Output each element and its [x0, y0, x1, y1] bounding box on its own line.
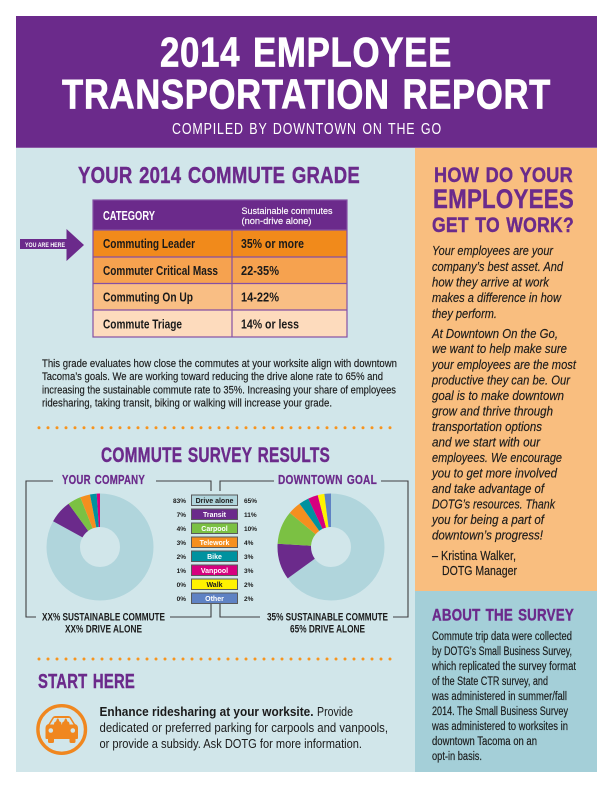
text block: survey description: of the State CTR survey, and	[432, 676, 548, 688]
text block: employees message: goal is to make downtown	[432, 389, 564, 403]
text block: survey description: 2014. The Small Business Survey	[432, 706, 568, 718]
subtitle: COMPILED BY DOWNTOWN ON THE GO	[172, 121, 442, 138]
text block: employees message: and take advantage of	[432, 482, 545, 496]
legend: commute modes with percentages: 65%	[244, 498, 257, 505]
table: commute grade categories: Sustainable commutes	[242, 206, 333, 217]
legend: commute modes with percentages: 2%	[177, 554, 186, 561]
legend: commute modes with percentages: 83%	[173, 498, 186, 505]
text block: employees message: DOTG’s resources. Thank	[432, 498, 556, 512]
legend: commute modes with percentages: Other	[205, 596, 224, 603]
table: commute grade categories	[93, 200, 347, 337]
caption: downtown goal: 35% SUSTAINABLE COMMUTE	[267, 612, 388, 624]
legend: commute modes with percentages: Telework	[200, 540, 230, 547]
text block: employees message: your employees are the most	[431, 358, 576, 372]
text block: survey description: was administered in summer/fall	[431, 691, 567, 703]
text block: survey description: Commute trip data were collected	[432, 631, 572, 643]
heading: start here: START HERE	[38, 671, 135, 693]
text block: employees message: you for being a part of	[431, 513, 545, 527]
table: commute grade categories: Commuter Critical Mass	[103, 264, 218, 278]
text block: employees message: they perform.	[432, 307, 497, 321]
legend: commute modes with percentages: 2%	[244, 596, 254, 603]
legend: commute modes with percentages: Drive alone	[196, 498, 233, 505]
text block: employees message: company’s best asset. And	[432, 260, 564, 274]
text block: employees message: and we start with our	[432, 436, 541, 450]
text block: employees message: you to get more involved	[431, 466, 558, 480]
text block: enhance ridesharing	[100, 705, 388, 751]
caption: your company: XX% DRIVE ALONE	[65, 624, 142, 636]
text block: employees message	[431, 244, 576, 542]
text block: survey description: opt-in basis.	[432, 751, 482, 763]
text block: enhance ridesharing: Enhance ridesharing at your worksite.	[100, 705, 314, 719]
table: commute grade categories: Commuting Leader	[103, 237, 195, 251]
legend: commute modes with percentages: 3%	[177, 540, 186, 547]
text block: survey description: downtown Tacoma on an	[432, 736, 537, 748]
text block: survey description: was administered to worksites in	[431, 721, 568, 733]
donut chart: downtown goal	[294, 510, 368, 584]
legend: commute modes with percentages: 0%	[177, 582, 186, 589]
legend: commute modes with percentages: 2%	[244, 582, 254, 589]
text block: grade explanation: increasing the sustainable commute rate to 35%. Increasing your share of employees	[42, 384, 396, 396]
legend: commute modes with percentages: 3%	[244, 568, 254, 575]
legend: commute modes with percentages: 0%	[177, 596, 186, 603]
text block: signature: – Kristina Walker,	[432, 549, 516, 563]
text block: enhance ridesharing: or provide a subsidy. Ask DOTG for more information.	[100, 737, 362, 751]
text block: signature: DOTG Manager	[442, 564, 517, 578]
text block: employees message: grow and thrive through	[432, 404, 553, 418]
panel: how do your employees get to work	[415, 148, 597, 591]
table: commute grade categories: (non-drive alone)	[242, 216, 312, 227]
text block: signature	[432, 549, 517, 578]
table: commute grade categories: 14-22%	[241, 290, 279, 304]
text block: employees message: transportation options	[432, 420, 542, 434]
text block: grade explanation: ridesharing, taking transit, biking or walking will increase your grade.	[42, 398, 332, 410]
text block: employees message: we want to help make sure	[432, 342, 567, 356]
legend: commute modes with percentages: Bike	[207, 554, 222, 561]
text block: employees message: At Downtown On the Go,	[431, 327, 558, 341]
table: commute grade categories: Commute Triage	[103, 318, 182, 332]
caption: downtown goal	[267, 612, 388, 636]
title: 2014 EMPLOYEE	[160, 28, 452, 76]
text block: employees message: Your employees are your	[432, 244, 554, 258]
table: commute grade categories: 14% or less	[241, 318, 299, 332]
arrow: you are here	[20, 229, 84, 261]
legend: commute modes with percentages: Carpool	[201, 526, 228, 533]
text block: survey description: by DOTG’s Small Business Survey,	[432, 646, 572, 658]
panel: commute grade and survey results	[16, 147, 597, 772]
legend: commute modes with percentages: 3%	[244, 554, 254, 561]
icon: car	[38, 706, 86, 753]
heading: about the survey: ABOUT THE SURVEY	[432, 606, 574, 624]
legend: commute modes with percentages: 1%	[177, 568, 186, 575]
legend: commute modes with percentages: Transit	[203, 512, 227, 519]
heading: commute survey results: COMMUTE SURVEY RESULTS	[101, 444, 330, 467]
bracket: downtown goal	[220, 481, 408, 617]
table: commute grade categories: CATEGORY	[103, 209, 155, 223]
legend: commute modes with percentages: 4%	[244, 540, 254, 547]
text block: employees message: employees. We encourage	[432, 451, 562, 465]
caption: downtown goal: 65% DRIVE ALONE	[290, 624, 365, 636]
caption: your company	[42, 612, 165, 636]
table: commute grade categories: Commuting On Up	[103, 290, 193, 304]
heading: downtown goal: DOWNTOWN GOAL	[278, 472, 377, 487]
text block: survey description	[431, 631, 577, 763]
heading: how do your employees get to work: EMPLOYEES	[433, 184, 574, 214]
panel: about the survey	[415, 591, 597, 772]
heading: how do your employees get to work: HOW DO YOUR	[434, 163, 573, 187]
heading: how do your employees get to work: GET TO WORK?	[432, 214, 574, 237]
title	[62, 28, 551, 118]
caption: your company: XX% SUSTAINABLE COMMUTE	[42, 612, 165, 624]
legend: commute modes with percentages: 7%	[177, 512, 186, 519]
legend: commute modes with percentages	[173, 495, 257, 604]
text block: enhance ridesharing: dedicated or preferred parking for carpools and vanpools,	[100, 721, 388, 735]
text block: enhance ridesharing: Provide	[317, 705, 353, 719]
legend: commute modes with percentages: 4%	[177, 526, 186, 533]
donut chart: your company	[63, 510, 137, 584]
text block: grade explanation: This grade evaluates how close the commutes at your worksite align with downtown	[42, 358, 397, 370]
text block: survey description: which replicated the survey format	[431, 661, 577, 673]
bracket: your company	[26, 481, 211, 617]
text block: grade explanation: Tacoma’s goals. We are working toward reducing the drive alone rate to 65% and	[42, 371, 383, 383]
text block: employees message: productive they can be. Our	[431, 374, 571, 388]
heading: your 2014 commute grade: YOUR 2014 COMMUTE GRADE	[78, 162, 360, 188]
heading: your company: YOUR COMPANY	[62, 472, 145, 487]
text block: employees message: downtown’s progress!	[432, 528, 543, 542]
legend: commute modes with percentages: 10%	[244, 526, 257, 533]
text block: employees message: how they arrive at work	[432, 276, 550, 290]
heading: how do your employees get to work	[432, 163, 574, 237]
legend: commute modes with percentages: Vanpool	[201, 568, 228, 575]
text block: employees message: makes a difference in how	[432, 291, 562, 305]
arrow: you are here: YOU ARE HERE	[25, 242, 66, 249]
legend: commute modes with percentages: 11%	[244, 512, 257, 519]
legend: commute modes with percentages: Walk	[206, 582, 223, 589]
text block: grade explanation	[42, 358, 397, 410]
table: commute grade categories: 22-35%	[241, 264, 279, 278]
header banner	[16, 16, 597, 148]
table: commute grade categories: 35% or more	[241, 237, 304, 251]
